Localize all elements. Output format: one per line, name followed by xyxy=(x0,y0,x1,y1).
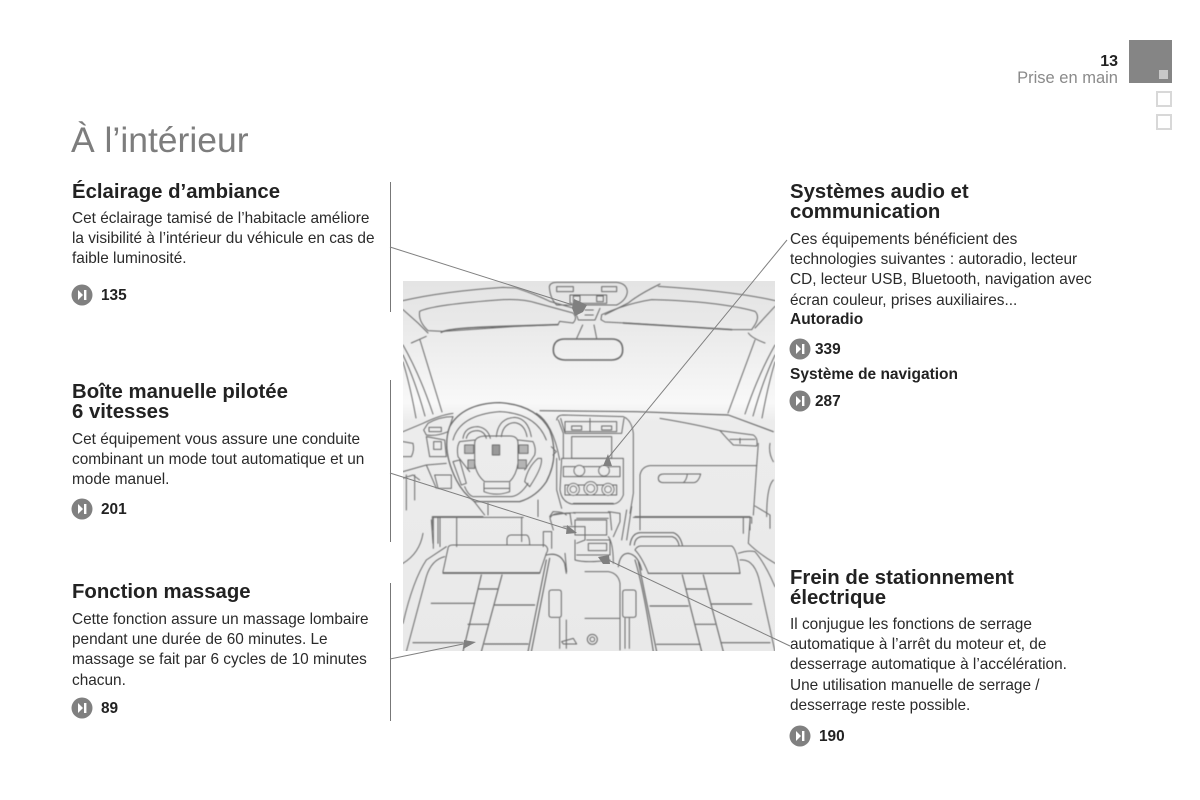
text block: mode manuel. xyxy=(72,471,169,488)
subheading: navigation: Système de navigation xyxy=(790,366,958,383)
panel: massage xyxy=(72,581,369,718)
page number: 13 xyxy=(1100,53,1118,70)
page reference: 339 xyxy=(815,341,841,358)
text block xyxy=(790,616,1067,714)
page reference xyxy=(790,390,841,412)
page reference: 201 xyxy=(101,501,127,518)
text block: desserrage automatique à l’accélération. xyxy=(790,656,1067,673)
panel: audio and communication xyxy=(790,181,1092,412)
chapter tab outline 2 xyxy=(1156,91,1172,107)
text block: desserrage reste possible. xyxy=(790,697,970,714)
text block: combinant un mode tout automatique et un xyxy=(72,451,364,468)
vertical rule: gearbox xyxy=(390,380,391,542)
vertical rule: lighting xyxy=(390,182,391,312)
page reference: 135 xyxy=(101,287,127,304)
text block xyxy=(790,231,1092,309)
left visor and roof xyxy=(403,287,575,343)
heading xyxy=(790,567,1014,609)
text block: faible luminosité. xyxy=(72,250,187,267)
right visor and roof xyxy=(601,284,775,343)
page reference xyxy=(790,726,845,746)
page reference xyxy=(72,698,118,718)
heading: Frein de stationnement xyxy=(790,567,1014,589)
page reference: 89 xyxy=(101,700,118,717)
chapter tab outline 3 xyxy=(1156,114,1172,130)
title: À l’intérieur xyxy=(71,120,249,160)
vertical rule: massage xyxy=(390,583,391,721)
text block: Il conjugue les fonctions de serrage xyxy=(790,616,1032,633)
section label: Prise en main xyxy=(1017,69,1118,87)
subheading: autoradio: Autoradio xyxy=(790,311,863,328)
text block: Cet éclairage tamisé de l’habitacle améliore xyxy=(72,210,369,227)
overhead console and mirror xyxy=(549,282,627,360)
steering wheel and left dash xyxy=(403,403,566,530)
gear selector and console xyxy=(433,503,752,572)
heading: électrique xyxy=(790,587,886,609)
left front seat xyxy=(403,520,566,652)
heading: Boîte manuelle pilotée xyxy=(72,381,288,403)
text block: automatique à l’arrêt du moteur et, de xyxy=(790,636,1046,653)
text block: Ces équipements bénéficient des xyxy=(790,231,1017,248)
heading: Fonction massage xyxy=(72,581,251,603)
page reference: 190 xyxy=(819,728,845,745)
page reference xyxy=(790,338,841,360)
heading: 6 vitesses xyxy=(72,401,169,423)
heading: communication xyxy=(790,201,940,223)
text block: Cette fonction assure un massage lombaire xyxy=(72,611,369,628)
text block xyxy=(72,611,369,689)
interior illustration xyxy=(390,240,790,660)
heading: Systèmes audio et xyxy=(790,181,969,203)
windshield pillars xyxy=(403,340,775,418)
centre stack, glovebox and right dash xyxy=(540,411,773,530)
text block xyxy=(72,210,375,267)
page reference: 287 xyxy=(815,393,841,410)
callout leader lines xyxy=(390,240,790,659)
panel: electric parking brake xyxy=(790,567,1067,746)
text block: chacun. xyxy=(72,672,126,689)
text block: Cet équipement vous assure une conduite xyxy=(72,431,360,448)
text block: la visibilité à l’intérieur du véhicule en cas de xyxy=(72,230,375,247)
page reference xyxy=(72,284,127,306)
text block: massage se fait par 6 cycles de 10 minutes xyxy=(72,651,367,668)
panel: gearbox xyxy=(72,381,364,520)
page reference xyxy=(72,498,127,520)
text block: technologies suivantes : autoradio, lecteur xyxy=(790,251,1077,268)
text block: Une utilisation manuelle de serrage / xyxy=(790,677,1040,694)
panel: ambient lighting xyxy=(72,180,375,306)
text block: CD, lecteur USB, Bluetooth, navigation avec xyxy=(790,271,1092,288)
text block xyxy=(72,431,364,488)
heading: Éclairage d’ambiance xyxy=(72,181,280,203)
heading xyxy=(790,181,969,223)
text block: écran couleur, prises auxiliaires... xyxy=(790,292,1017,309)
chapter tab marker xyxy=(1129,40,1172,83)
right front seat and armrest xyxy=(562,520,775,652)
heading xyxy=(72,381,288,423)
text block: pendant une durée de 60 minutes. Le xyxy=(72,631,328,648)
